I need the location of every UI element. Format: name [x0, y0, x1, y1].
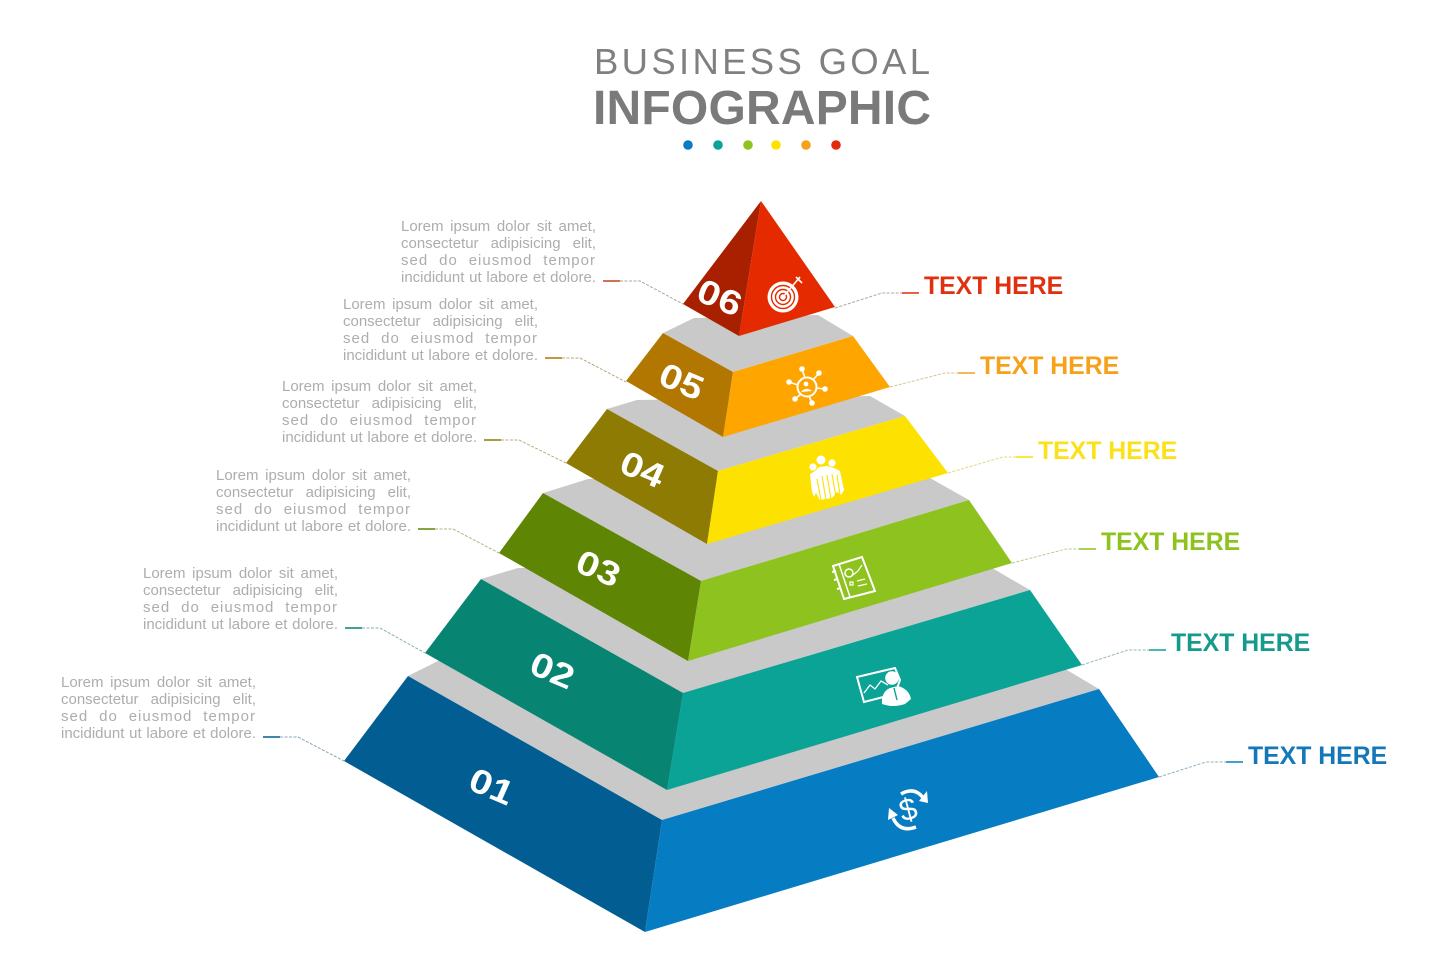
tier 03 green	[499, 478, 1012, 661]
icon: network hub	[787, 367, 827, 405]
text block 03: consectetur adipisicing elit,	[216, 484, 411, 501]
icon: group of people	[809, 456, 844, 500]
text block 04: incididunt ut labore et dolore.	[282, 429, 477, 446]
tier 01 blue	[344, 660, 1159, 932]
icon: dollar exchange: $	[895, 790, 921, 829]
text block 06: consectetur adipisicing elit,	[401, 235, 596, 252]
number 03: 03	[574, 540, 622, 596]
right label 04: TEXT HERE	[1038, 438, 1177, 465]
right label 06: TEXT HERE	[924, 273, 1063, 300]
text block 01: sed do eiusmod tempor	[61, 708, 256, 725]
right label 06	[835, 273, 1063, 308]
right label 01: TEXT HERE	[1248, 743, 1387, 770]
title line: business goal: BUSINESS GOAL	[594, 41, 930, 82]
number 02: 02	[528, 642, 576, 698]
tier 02 teal	[425, 568, 1082, 790]
text block 01	[61, 674, 256, 742]
left leader line 06	[603, 281, 683, 304]
tier 05 orange	[626, 315, 890, 437]
text block 02: sed do eiusmod tempor	[143, 599, 338, 616]
text block 02: incididunt ut labore et dolore.	[143, 616, 338, 633]
right label 04	[948, 438, 1177, 473]
text block 06: incididunt ut labore et dolore.	[401, 269, 596, 286]
icon: presenter with chart	[857, 668, 911, 706]
icon: notebook	[832, 557, 875, 599]
title line: infographic: INFOGRAPHIC	[593, 82, 931, 135]
tier 04 yellow	[566, 396, 948, 544]
number 01: 01	[467, 758, 515, 814]
text block 04: Lorem ipsum dolor sit amet,	[282, 378, 477, 395]
text block 02	[143, 565, 338, 633]
right label 03: TEXT HERE	[1101, 529, 1240, 556]
text block 05: incididunt ut labore et dolore.	[343, 347, 538, 364]
text block 04	[282, 378, 477, 446]
number 05: 05	[657, 353, 706, 409]
title	[593, 41, 931, 135]
number 04: 04	[618, 441, 666, 497]
left leader line 03	[418, 529, 499, 553]
text block 01: Lorem ipsum dolor sit amet,	[61, 674, 256, 691]
number 06: 06	[695, 269, 744, 325]
text block 05	[343, 296, 538, 364]
right label 02: TEXT HERE	[1171, 630, 1310, 657]
text block 04: sed do eiusmod tempor	[282, 412, 477, 429]
tier 06 red apex	[683, 201, 835, 336]
text block 03: Lorem ipsum dolor sit amet,	[216, 467, 411, 484]
right label 02	[1082, 630, 1310, 665]
right label 01	[1159, 743, 1387, 777]
text block 04: consectetur adipisicing elit,	[282, 395, 477, 412]
text block 03: sed do eiusmod tempor	[216, 501, 411, 518]
text block 05: consectetur adipisicing elit,	[343, 313, 538, 330]
icon: target with arrow	[768, 277, 802, 312]
colour dots row	[683, 140, 841, 150]
right label 05	[890, 353, 1119, 387]
text block 06: sed do eiusmod tempor	[401, 252, 596, 269]
icon: dollar exchange	[888, 790, 928, 829]
text block 02: Lorem ipsum dolor sit amet,	[143, 565, 338, 582]
text block 06: Lorem ipsum dolor sit amet,	[401, 218, 596, 235]
text block 01: incididunt ut labore et dolore.	[61, 725, 256, 742]
text block 06	[401, 218, 596, 286]
left leader line 01	[263, 737, 344, 761]
left leader line 05	[545, 358, 626, 382]
text block 03	[216, 467, 411, 535]
text block 02: consectetur adipisicing elit,	[143, 582, 338, 599]
text block 05: Lorem ipsum dolor sit amet,	[343, 296, 538, 313]
text block 03: incididunt ut labore et dolore.	[216, 518, 411, 535]
left leader line 02	[345, 628, 425, 653]
right label 05: TEXT HERE	[980, 353, 1119, 380]
text block 05: sed do eiusmod tempor	[343, 330, 538, 347]
text block 01: consectetur adipisicing elit,	[61, 691, 256, 708]
right label 03	[1012, 529, 1240, 563]
left leader line 04	[484, 440, 566, 463]
